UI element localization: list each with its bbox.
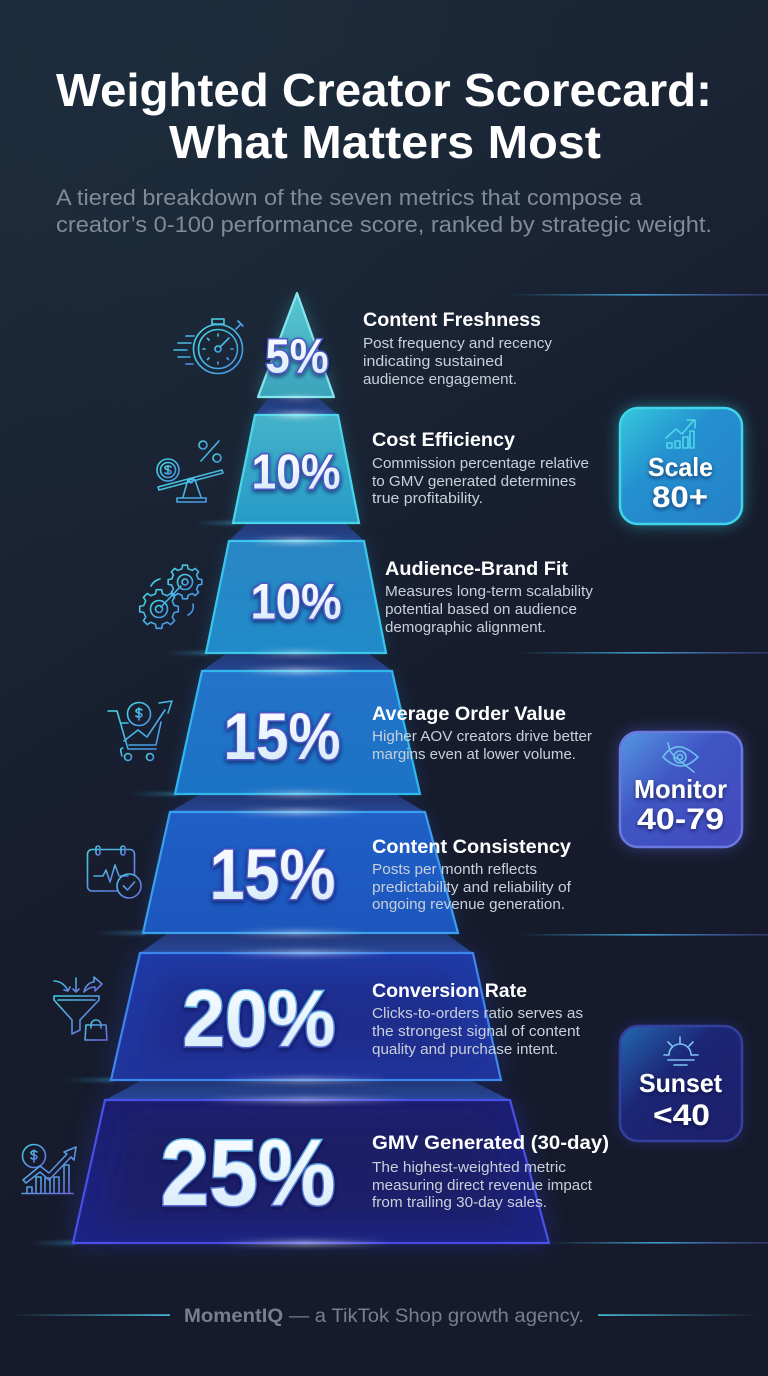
subtitle bbox=[56, 185, 712, 237]
pyramid glow bbox=[73, 291, 549, 1243]
tier 3: audience-brand fit bbox=[140, 539, 594, 655]
pyramid block: 10%: 10% bbox=[250, 574, 342, 630]
label: Average Order Value bbox=[372, 703, 566, 725]
label: Cost Efficiency bbox=[372, 429, 515, 451]
label: quality and purchase intent. bbox=[372, 1042, 558, 1058]
pyramid block: 20% bbox=[111, 951, 501, 1082]
pyramid block: 15% bbox=[143, 810, 458, 935]
label: Conversion Rate bbox=[372, 980, 527, 1002]
pyramid block: 20%: 20% bbox=[182, 974, 336, 1063]
title bbox=[56, 64, 712, 168]
label: audience engagement. bbox=[363, 372, 517, 388]
pyramid block: 15%: 15% bbox=[224, 699, 340, 773]
icon: funnel with shopping bag bbox=[54, 977, 107, 1040]
footer: MomentIQ — a TikTok Shop growth agency. bbox=[184, 1306, 584, 1327]
title: What Matters Most bbox=[169, 116, 601, 168]
label: GMV Generated (30-day) bbox=[372, 1132, 609, 1154]
label bbox=[372, 429, 589, 507]
icon: shopping cart with growth arrow bbox=[108, 701, 172, 760]
pyramid block: 10% bbox=[206, 539, 386, 655]
pyramid block: 5% bbox=[258, 293, 334, 399]
label bbox=[372, 980, 583, 1058]
badge: sunset <40: <40 bbox=[653, 1099, 710, 1132]
label: demographic alignment. bbox=[385, 620, 546, 636]
label: indicating sustained bbox=[363, 354, 503, 370]
divider lines bbox=[510, 294, 768, 1244]
icon: revenue growth chart bbox=[22, 1144, 76, 1194]
label: Commission percentage relative bbox=[372, 456, 589, 472]
icon: growth chart bbox=[666, 420, 695, 448]
label: to GMV generated determines bbox=[372, 474, 576, 490]
badge: scale 80+: 80+ bbox=[652, 481, 708, 514]
icon: calendar with pulse and check bbox=[88, 846, 141, 898]
tier 4: average order value bbox=[108, 669, 592, 796]
label: Measures long-term scalability bbox=[385, 584, 594, 600]
badge: scale 80+ bbox=[620, 408, 742, 524]
icon: stopwatch bbox=[174, 319, 243, 374]
label: Post frequency and recency bbox=[363, 336, 553, 352]
pyramid block: 10%: 10% bbox=[252, 446, 340, 500]
label: Posts per month reflects bbox=[372, 862, 537, 878]
subtitle: A tiered breakdown of the seven metrics that compose a bbox=[56, 185, 642, 210]
tier 5: content consistency bbox=[88, 810, 572, 935]
pyramid block: 5%: 5% bbox=[266, 330, 328, 384]
label: Clicks-to-orders ratio serves as bbox=[372, 1006, 583, 1022]
icon: eye bbox=[663, 743, 698, 772]
pyramid block: 15%: 15% bbox=[210, 836, 336, 915]
icon: sun on horizon bbox=[664, 1037, 698, 1065]
label: true profitability. bbox=[372, 491, 483, 507]
pyramid block: 25%: 25% bbox=[160, 1120, 336, 1225]
tier 2: cost efficiency bbox=[157, 413, 589, 523]
badge: monitor 40-79: 40-79 bbox=[637, 803, 724, 836]
tier 1: content freshness bbox=[174, 293, 553, 399]
base edge light streaks bbox=[30, 522, 235, 1244]
badge: sunset <40 bbox=[620, 1026, 742, 1141]
label: ongoing revenue generation. bbox=[372, 897, 565, 913]
pyramid block: 10% bbox=[233, 413, 359, 523]
icon: balance scale bbox=[157, 441, 223, 502]
label: Content Consistency bbox=[372, 836, 571, 858]
label bbox=[372, 703, 592, 763]
label: Higher AOV creators drive better bbox=[372, 729, 592, 745]
label: predictability and reliability of bbox=[372, 880, 572, 896]
label bbox=[363, 309, 553, 388]
icon: gears and targets bbox=[140, 565, 202, 628]
pyramid block: 25% bbox=[73, 1098, 549, 1245]
label: Content Freshness bbox=[363, 309, 541, 331]
label: margins even at lower volume. bbox=[372, 747, 576, 763]
label bbox=[372, 836, 572, 913]
label bbox=[372, 1132, 609, 1211]
label: from trailing 30-day sales. bbox=[372, 1195, 547, 1211]
badge: sunset <40: Sunset bbox=[639, 1068, 722, 1098]
badge: monitor 40-79 bbox=[620, 732, 742, 847]
tier 6: conversion rate bbox=[54, 951, 583, 1082]
badge: monitor 40-79: Monitor bbox=[634, 774, 727, 804]
label: the strongest signal of content bbox=[372, 1024, 580, 1040]
label bbox=[385, 558, 594, 636]
label: measuring direct revenue impact bbox=[372, 1178, 592, 1194]
label: Audience-Brand Fit bbox=[385, 558, 569, 580]
label: potential based on audience bbox=[385, 602, 577, 618]
label: The highest-weighted metric bbox=[372, 1160, 566, 1176]
badge: scale 80+: Scale bbox=[648, 452, 713, 482]
pyramid block: 15% bbox=[175, 669, 420, 796]
subtitle: creator’s 0-100 performance score, ranked by strategic weight. bbox=[56, 212, 712, 237]
tier 7: gmv generated bbox=[22, 1098, 609, 1245]
pyramid connectors bbox=[105, 398, 510, 1100]
title: Weighted Creator Scorecard: bbox=[56, 64, 712, 116]
